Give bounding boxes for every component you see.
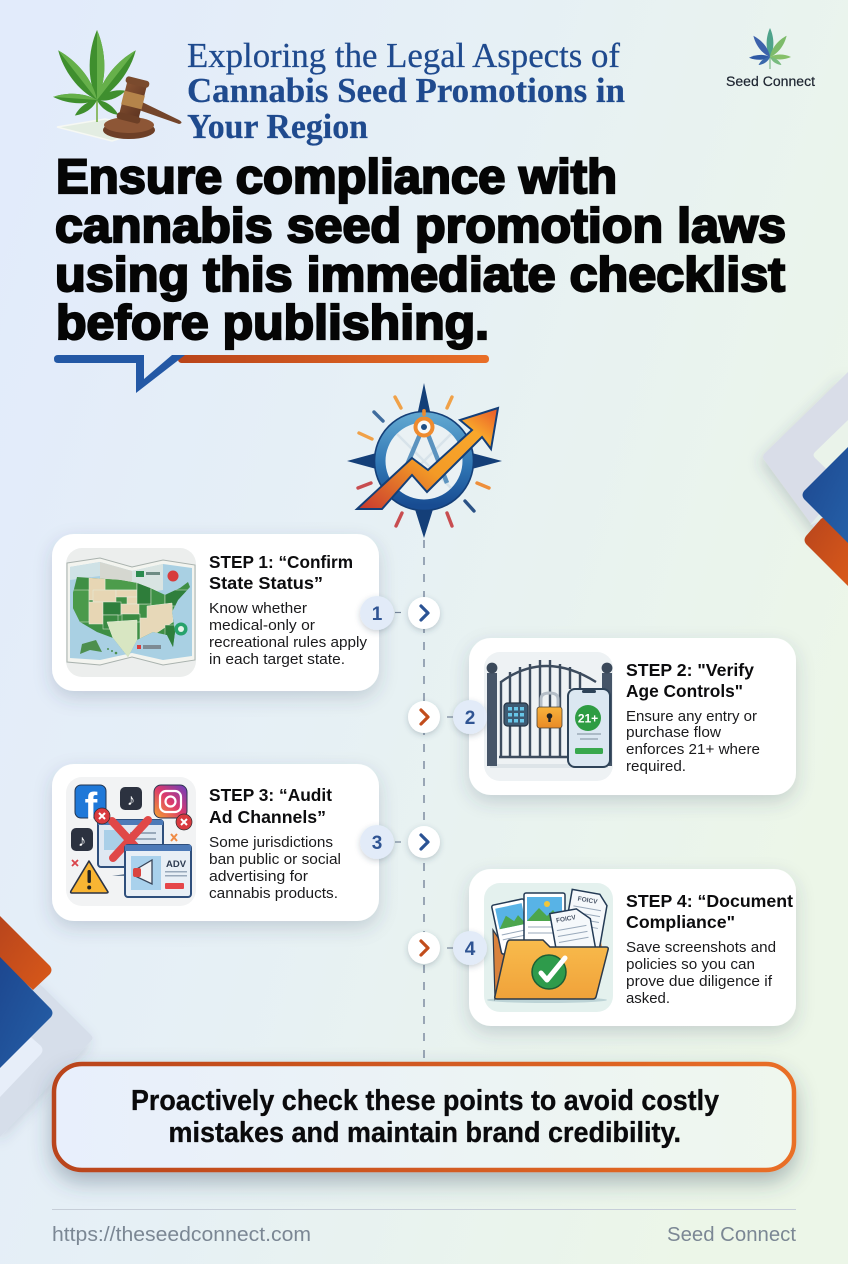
headline: using this immediate checklist bbox=[55, 249, 785, 302]
panel: step 3 bbox=[52, 764, 379, 921]
step 1 text: medical-only or bbox=[209, 618, 315, 634]
gavel block bbox=[103, 121, 155, 139]
x badges bbox=[94, 808, 110, 824]
step 2 text: Age Controls" bbox=[626, 681, 743, 701]
panel: step 2 bbox=[469, 638, 796, 795]
compass divider legs bbox=[407, 432, 447, 483]
timeline node 3: 3 bbox=[372, 833, 382, 854]
icon: compliance folder bbox=[484, 883, 613, 1012]
warning triangle bbox=[71, 861, 108, 893]
step 2 text: enforces 21+ where bbox=[626, 742, 760, 758]
callout text: mistakes and maintain brand credibility. bbox=[168, 1117, 681, 1149]
tiktok tile bbox=[120, 787, 142, 810]
step 2 text bbox=[626, 660, 760, 775]
step 3 text bbox=[209, 785, 341, 902]
instagram tile bbox=[154, 785, 187, 818]
timeline node 4: 4 bbox=[465, 939, 476, 960]
step 1 text: in each target state. bbox=[209, 652, 345, 668]
step 1 text bbox=[209, 552, 368, 668]
callout bbox=[54, 1064, 794, 1170]
step 1 text: STEP 1: “Confirm bbox=[209, 552, 353, 572]
step 4 text: STEP 4: “Document bbox=[626, 891, 793, 911]
map badges bbox=[168, 570, 178, 582]
step 3 text: ban public or social bbox=[209, 852, 341, 868]
callout text: Proactively check these points to avoid costly bbox=[131, 1085, 719, 1117]
padlock bbox=[541, 693, 558, 708]
rising arrow bbox=[357, 408, 498, 509]
red cross bbox=[112, 820, 148, 858]
icon: banned ad channels bbox=[66, 777, 196, 906]
step 2 text: purchase flow bbox=[626, 725, 722, 741]
title: Cannabis Seed Promotions in bbox=[187, 72, 625, 110]
US states bbox=[73, 577, 190, 657]
title bbox=[187, 37, 625, 146]
step 3 text: Ad Channels” bbox=[209, 807, 326, 827]
panel: step 4 bbox=[469, 869, 796, 1026]
step 1 text: Know whether bbox=[209, 601, 307, 617]
step 2 text: STEP 2: "Verify bbox=[626, 660, 754, 680]
headline: cannabis seed promotion laws bbox=[55, 200, 786, 253]
icon: logo leaf bbox=[749, 28, 791, 69]
step 3 text: STEP 3: “Audit bbox=[209, 785, 332, 805]
icon: locked gate with age-check phone: 21+ bbox=[578, 712, 598, 726]
second tiktok tile bbox=[71, 828, 93, 851]
timeline node 1 bbox=[360, 596, 440, 630]
card 4 background bbox=[469, 869, 796, 1026]
icon: banned ad channels: ♪ bbox=[78, 833, 86, 850]
check badge bbox=[532, 955, 566, 989]
step 1 text: recreational rules apply bbox=[209, 635, 368, 651]
gavel handle bbox=[139, 102, 182, 124]
card 3 background bbox=[52, 764, 379, 921]
headline underline with speech tail bbox=[54, 355, 489, 393]
timeline node 2: 2 bbox=[465, 708, 475, 729]
step 4 text: Save screenshots and bbox=[626, 940, 776, 956]
timeline node 2 bbox=[408, 700, 487, 734]
icon: banned ad channels: ♪ bbox=[127, 792, 135, 809]
step 4 text: policies so you can bbox=[626, 957, 755, 973]
callout text bbox=[131, 1085, 719, 1149]
document under gavel bbox=[57, 119, 152, 141]
icon: cannabis leaf with gavel bbox=[53, 30, 181, 141]
timeline node 4 bbox=[408, 931, 487, 965]
step 2 text: Ensure any entry or bbox=[626, 709, 757, 725]
icon: locked gate with age-check phone bbox=[484, 652, 613, 781]
phone bbox=[568, 689, 610, 767]
title: Your Region bbox=[187, 108, 368, 146]
Alaska and Hawaii bbox=[80, 640, 102, 654]
compass rays bbox=[358, 397, 489, 526]
monitor bbox=[98, 820, 163, 867]
icon: compass with rising arrow bbox=[347, 383, 502, 538]
headline: before publishing. bbox=[56, 297, 489, 350]
icon: compliance folder: FOICV bbox=[577, 896, 598, 906]
icon: banned ad channels: ADV bbox=[166, 859, 187, 870]
decorative diamonds right bbox=[763, 372, 848, 586]
logo wordmark: Seed Connect bbox=[726, 74, 815, 89]
step 1 text: State Status” bbox=[209, 573, 323, 593]
screenshot documents bbox=[491, 898, 524, 955]
step 4 text: asked. bbox=[626, 991, 670, 1007]
icon: compliance folder: FOICV bbox=[556, 914, 577, 925]
timeline node 1: 1 bbox=[372, 604, 383, 625]
footer bbox=[52, 1209, 796, 1246]
headline bbox=[55, 151, 786, 350]
icon: banned ad channels: f bbox=[85, 786, 98, 828]
icon: folded US map bbox=[66, 548, 196, 677]
ad window bbox=[125, 845, 191, 897]
card 1 background bbox=[52, 534, 379, 691]
title: Exploring the Legal Aspects of bbox=[187, 37, 621, 75]
footer brand: Seed Connect bbox=[667, 1224, 796, 1246]
callout box bbox=[54, 1064, 794, 1170]
leaf blades bbox=[53, 30, 141, 118]
step 3 text: cannabis products. bbox=[209, 886, 338, 902]
brand logo: Seed Connect bbox=[726, 28, 815, 89]
step 4 text: prove due diligence if bbox=[626, 974, 773, 990]
compass points bbox=[347, 383, 502, 538]
compass ring bbox=[380, 417, 468, 505]
front folder bbox=[495, 940, 608, 999]
gavel head bbox=[116, 76, 150, 124]
keypad bbox=[504, 703, 528, 726]
facebook tile bbox=[75, 785, 106, 818]
decorative diamonds left bbox=[0, 916, 92, 1137]
card 2 background bbox=[469, 638, 796, 795]
footer url: https://theseedconnect.com bbox=[52, 1224, 311, 1246]
step 2 text: required. bbox=[626, 759, 686, 775]
panel: step 1 bbox=[52, 534, 379, 691]
leaf stem bbox=[96, 100, 98, 122]
step 4 text: Compliance" bbox=[626, 912, 735, 932]
dashed timeline bbox=[423, 540, 425, 1062]
step 3 text: Some jurisdictions bbox=[209, 835, 333, 851]
timeline node 3 bbox=[360, 825, 440, 859]
headline: Ensure compliance with bbox=[56, 151, 617, 204]
step 3 text: advertising for bbox=[209, 869, 308, 885]
step 4 text bbox=[626, 891, 793, 1007]
